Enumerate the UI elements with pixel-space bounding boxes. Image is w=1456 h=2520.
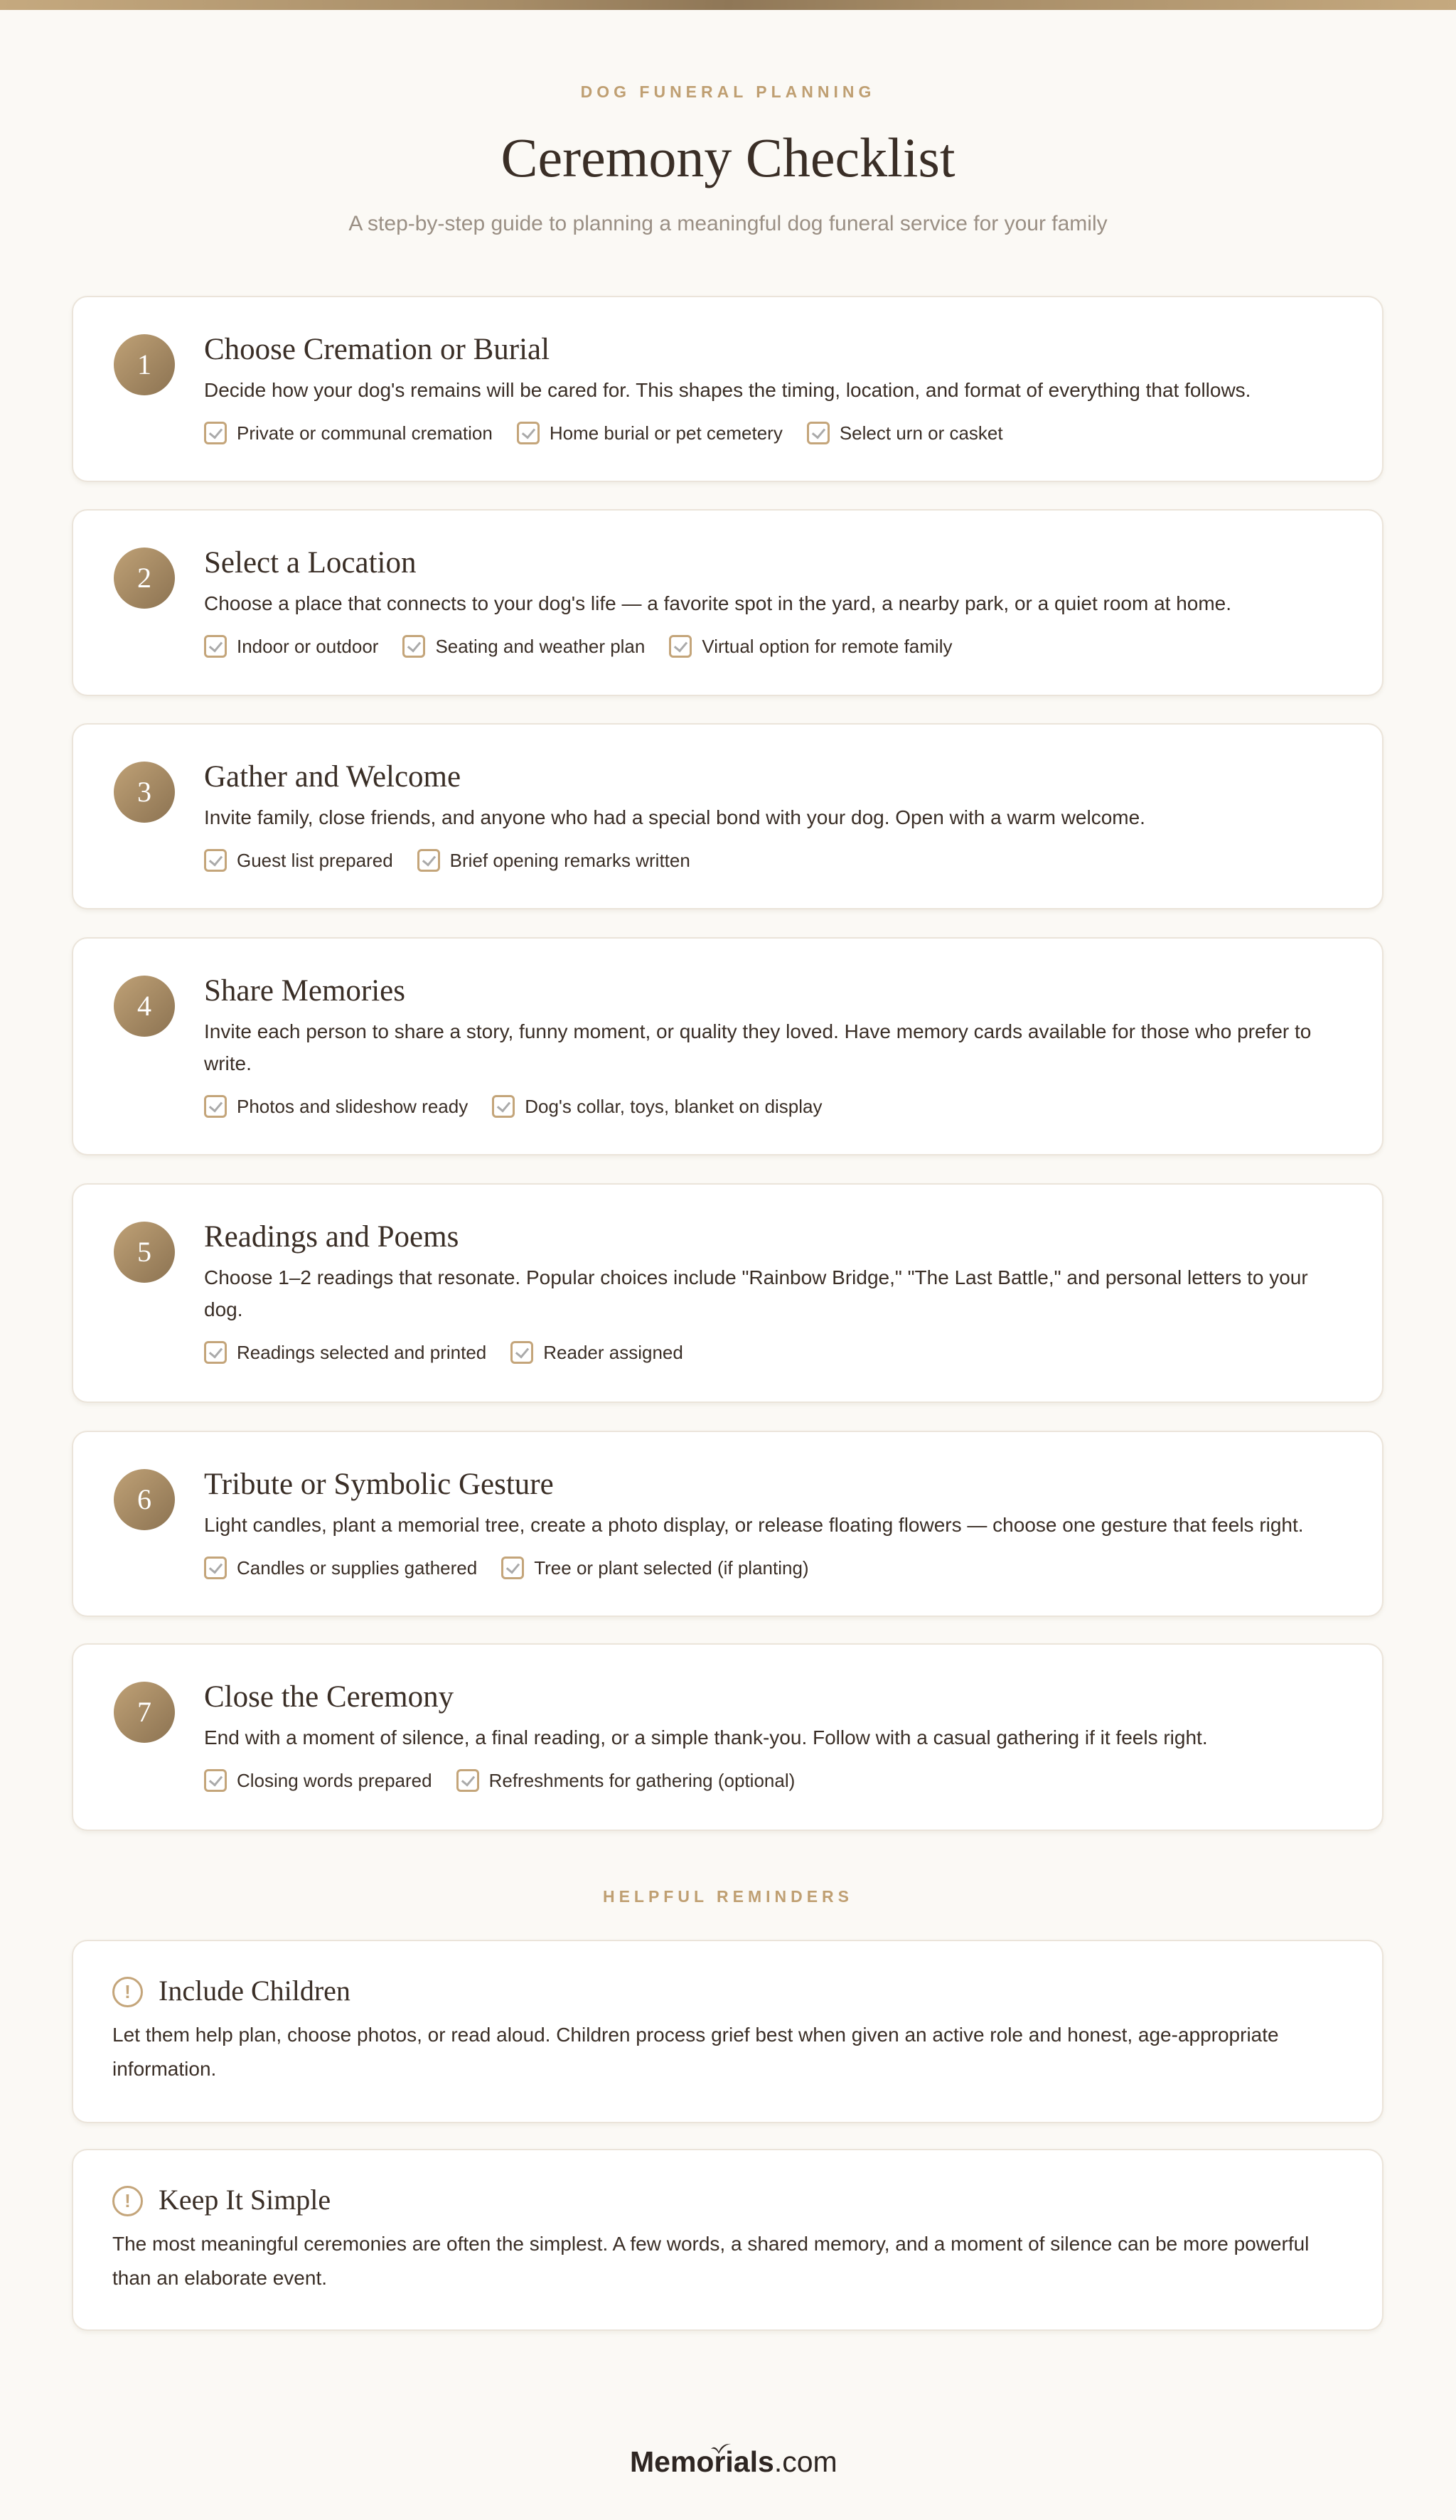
step 4 content: Invite each person to share a story, funny moment, or quality they loved. Have memory cards available for those who prefer to — [204, 1020, 1311, 1042]
eyebrow: dog funeral planning: DOG FUNERAL PLANNING — [581, 82, 875, 101]
number 2 — [114, 548, 175, 609]
step 5 content: dog. — [204, 1298, 243, 1320]
step 1 content — [204, 333, 1251, 444]
step 7 content: Refreshments for gathering (optional) — [489, 1769, 795, 1790]
step 2 content: Seating and weather plan — [435, 636, 645, 657]
step 3 content: Invite family, close friends, and anyone who had a special bond with your dog. Open with a warm welcome. — [204, 806, 1145, 828]
step 2 content: Choose a place that connects to your dog's life — a favorite spot in the yard, a nearby park, or a quiet room at home. — [204, 592, 1231, 614]
number 7: 7 — [137, 1696, 151, 1728]
card: step 4 — [72, 937, 1383, 1155]
step 2 content: Indoor or outdoor — [237, 636, 378, 657]
number 4: 4 — [137, 990, 151, 1022]
reminder text: Let them help plan, choose photos, or read aloud. Children process grief best when given an active role and honest, age-appropriate — [112, 2024, 1279, 2046]
step 1 content: Private or communal cremation — [237, 422, 493, 444]
top bar — [0, 0, 1456, 10]
step 2 content — [204, 546, 1231, 658]
step 6 content: Candles or supplies gathered — [237, 1557, 477, 1579]
number 5: 5 — [137, 1236, 151, 1268]
step 6 content: Light candles, plant a memorial tree, create a photo display, or release floating flowers — choose one gesture that feels right. — [204, 1514, 1304, 1536]
step 5 content — [204, 1220, 1308, 1364]
reminder title: Include Children — [159, 1975, 350, 2007]
step 6 content: Tree or plant selected (if planting) — [534, 1557, 809, 1579]
reminder: keep it simple — [72, 2149, 1383, 2331]
card: step 1 — [72, 296, 1383, 482]
heading: helpful reminders: HELPFUL REMINDERS — [603, 1887, 853, 1906]
icon: alert — [112, 1977, 143, 2007]
step 3 content: Brief opening remarks written — [450, 849, 690, 870]
number 5 — [114, 1222, 175, 1283]
number 1 — [114, 334, 175, 395]
step 7 content: Closing words prepared — [237, 1769, 432, 1790]
icon: alert: ! — [124, 2190, 131, 2211]
icon: alert — [112, 2186, 143, 2216]
number 1: 1 — [137, 348, 151, 380]
step 3 content: Guest list prepared — [237, 849, 393, 870]
step 1 content: Home burial or pet cemetery — [550, 422, 783, 444]
number 6: 6 — [137, 1483, 151, 1515]
step 4 content: Dog's collar, toys, blanket on display — [525, 1095, 823, 1116]
logo: Memorials.com — [630, 2445, 837, 2478]
step 1 content: Choose Cremation or Burial — [204, 333, 550, 366]
step 7 content — [204, 1680, 1208, 1792]
number 3: 3 — [137, 776, 151, 808]
step 1 content: Decide how your dog's remains will be cared for. This shapes the timing, location, and format of everything that follows. — [204, 379, 1251, 401]
number 7 — [114, 1682, 175, 1743]
step 2 content: Select a Location — [204, 546, 416, 580]
reminder text: than an elaborate event. — [112, 2267, 327, 2289]
step 5 content: Reader assigned — [543, 1341, 683, 1362]
icon: alert: ! — [124, 1981, 131, 2002]
step 1 content: Select urn or casket — [840, 422, 1003, 444]
step 4 content: Share Memories — [204, 974, 405, 1008]
step 3 content — [204, 760, 1145, 872]
step 5 content: Readings selected and printed — [237, 1341, 486, 1362]
step 4 content: write. — [204, 1052, 252, 1074]
number 3 — [114, 762, 175, 823]
reminder text: The most meaningful ceremonies are often the simplest. A few words, a shared memory, and a moment of silence can be more powerful — [112, 2233, 1309, 2255]
card: step 2 — [72, 509, 1383, 696]
step 4 content: Photos and slideshow ready — [237, 1095, 468, 1116]
reminder title: Keep It Simple — [159, 2184, 331, 2216]
step 6 content: Tribute or Symbolic Gesture — [204, 1468, 554, 1501]
reminder text — [112, 2024, 1279, 2080]
card: step 6 — [72, 1431, 1383, 1617]
step 2 content: Virtual option for remote family — [702, 636, 952, 657]
step 6 content — [204, 1468, 1304, 1579]
subtitle: A step-by-step guide to planning a meaningful dog funeral service for your family — [348, 212, 1108, 235]
step 5 content: Choose 1–2 readings that resonate. Popular choices include "Rainbow Bridge," "The Last Battle," and personal letters to your — [204, 1266, 1308, 1288]
step 4 content — [204, 974, 1311, 1118]
step 7 content: Close the Ceremony — [204, 1680, 454, 1714]
number 6 — [114, 1469, 175, 1530]
reminder text: information. — [112, 2058, 216, 2080]
card: step 5 — [72, 1183, 1383, 1403]
card: step 7 — [72, 1643, 1383, 1831]
reminder: include children — [72, 1940, 1383, 2123]
step 3 content: Gather and Welcome — [204, 760, 461, 794]
number 4 — [114, 976, 175, 1037]
step 5 content: Readings and Poems — [204, 1220, 459, 1254]
step 7 content: End with a moment of silence, a final reading, or a simple thank-you. Follow with a casual gathering if it feels right. — [204, 1726, 1208, 1748]
card: step 3 — [72, 723, 1383, 909]
number 2: 2 — [137, 562, 151, 594]
reminder text — [112, 2233, 1309, 2289]
title: Ceremony Checklist — [500, 127, 956, 188]
